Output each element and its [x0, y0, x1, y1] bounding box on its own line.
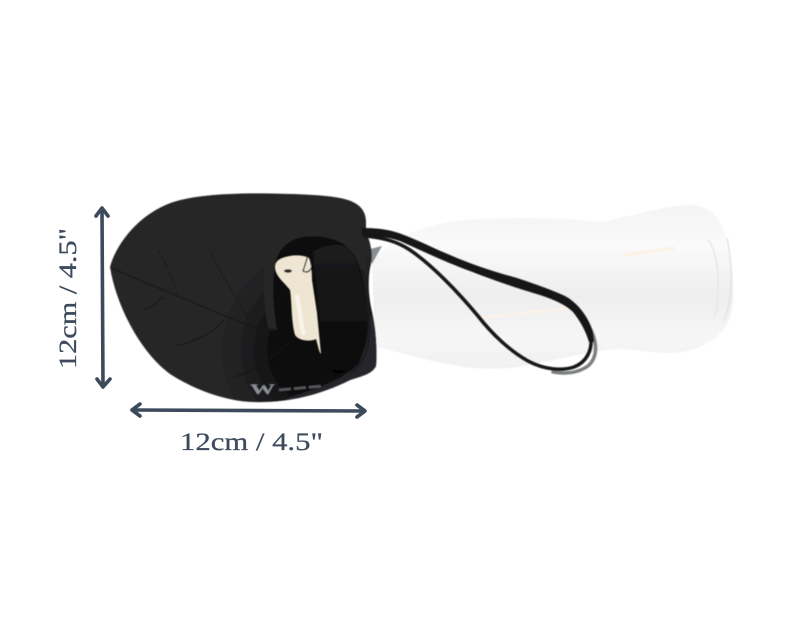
bottle body [366, 205, 733, 369]
outer flap at right corner [286, 314, 376, 400]
strap grey edge [553, 330, 596, 373]
bowl shading [240, 264, 377, 403]
leaf surface [109, 192, 377, 403]
height label: 12cm / 4.5" [55, 228, 82, 369]
strap upper band [362, 228, 594, 342]
cup body beside cap [312, 245, 367, 373]
width arrow [132, 404, 365, 417]
infographic: bottle with dimensions [59, 192, 733, 451]
lanyard strap [362, 228, 596, 373]
leaf veins [112, 250, 290, 377]
cream cap [275, 249, 321, 354]
height arrow [96, 208, 110, 387]
right rim of strap [350, 270, 369, 374]
strap lower thin side [366, 236, 591, 369]
leaf bowl [109, 192, 378, 403]
strap loop [264, 219, 367, 330]
width label: 12cm / 4.5" [180, 429, 323, 456]
logo mark: W [250, 382, 275, 398]
inner cavity [266, 236, 368, 381]
